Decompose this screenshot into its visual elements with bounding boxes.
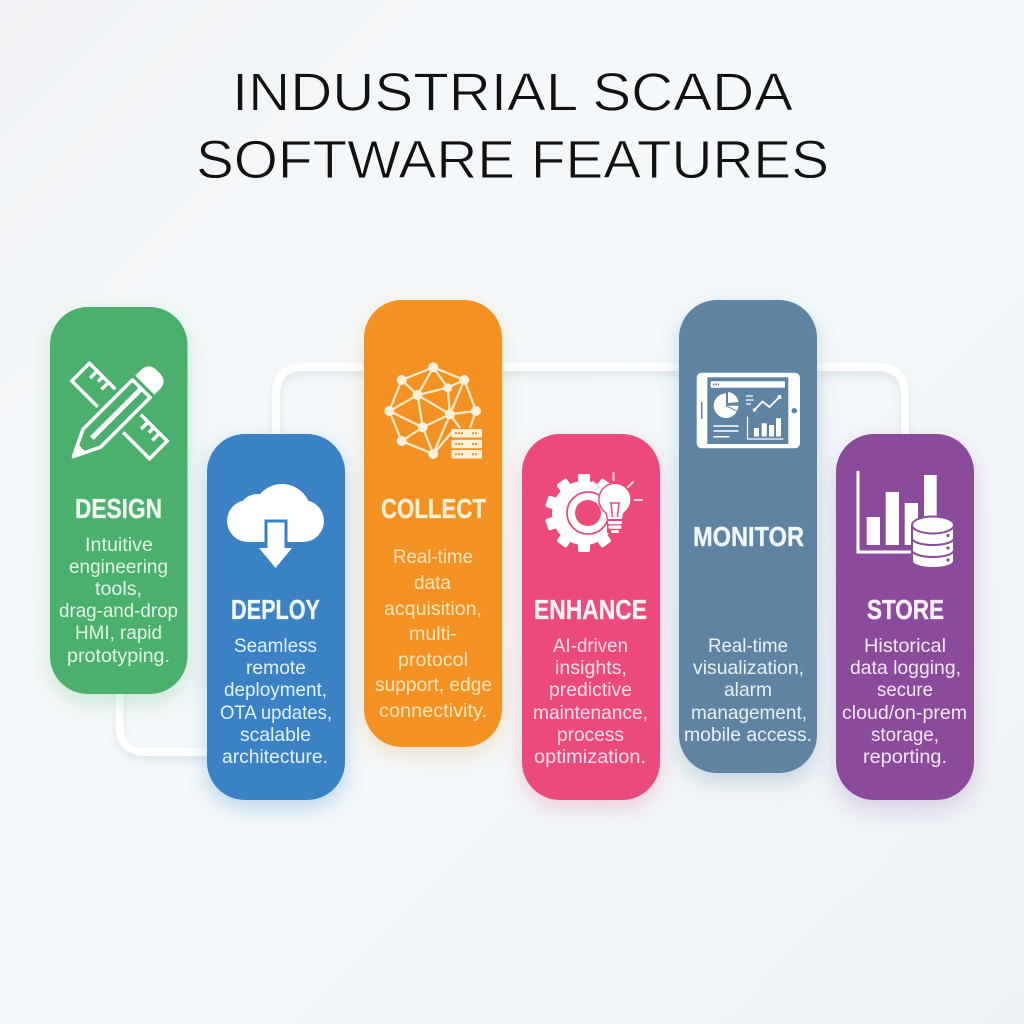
store description bbox=[842, 635, 967, 768]
monitor description: mobile access. bbox=[684, 724, 812, 746]
design description: HMI, rapid bbox=[75, 622, 162, 644]
design description: engineering bbox=[69, 556, 168, 578]
panel: monitor bbox=[679, 300, 817, 773]
collect card background bbox=[364, 300, 502, 747]
panel: collect bbox=[364, 300, 502, 747]
monitor description bbox=[684, 635, 812, 746]
enhance description: AI-driven bbox=[553, 635, 628, 657]
monitor heading: MONITOR bbox=[693, 521, 804, 552]
icon: cloud download bbox=[227, 484, 324, 568]
enhance description: optimization. bbox=[534, 746, 646, 768]
enhance card background bbox=[522, 434, 660, 800]
store description: Historical bbox=[864, 635, 946, 657]
collect description: Real-time bbox=[393, 546, 473, 568]
deploy description: scalable bbox=[240, 724, 311, 746]
design description: Intuitive bbox=[85, 534, 153, 556]
deploy card background bbox=[207, 434, 345, 800]
deploy description: architecture. bbox=[222, 746, 328, 768]
enhance description: process bbox=[557, 724, 624, 746]
collect heading: COLLECT bbox=[381, 493, 486, 524]
icon: data network bbox=[384, 362, 482, 459]
deploy description: remote bbox=[246, 657, 306, 679]
monitor description: management, bbox=[691, 702, 807, 724]
icon: tablet dashboard bbox=[697, 373, 800, 448]
monitor description: alarm bbox=[724, 679, 772, 701]
collect description: connectivity. bbox=[379, 700, 487, 722]
store description: reporting. bbox=[863, 746, 947, 768]
store description: data logging, bbox=[850, 657, 961, 679]
title: INDUSTRIAL SCADA bbox=[232, 64, 793, 122]
collect description: support, edge bbox=[375, 674, 492, 696]
monitor card background bbox=[679, 300, 817, 773]
enhance description: predictive bbox=[549, 679, 632, 701]
store description: storage, bbox=[871, 724, 939, 746]
collect description: multi- bbox=[409, 623, 457, 645]
design description bbox=[59, 534, 178, 667]
enhance heading: ENHANCE bbox=[534, 594, 647, 625]
panel: enhance bbox=[522, 434, 660, 800]
deploy description: Seamless bbox=[234, 635, 317, 657]
design description: prototyping. bbox=[67, 645, 170, 667]
enhance description: maintenance, bbox=[533, 702, 648, 724]
store card background bbox=[836, 434, 974, 800]
icon: bar chart and database bbox=[858, 471, 954, 568]
connector lines bbox=[120, 367, 905, 752]
icon: gear and light bulb bbox=[545, 473, 642, 552]
panel: deploy bbox=[207, 434, 345, 800]
store heading: STORE bbox=[867, 594, 944, 625]
collect description: acquisition, bbox=[384, 598, 482, 620]
deploy description: OTA updates, bbox=[220, 702, 332, 724]
monitor description: Real-time bbox=[708, 635, 788, 657]
design card background bbox=[50, 307, 188, 694]
panel: design bbox=[50, 307, 188, 694]
deploy description bbox=[220, 635, 332, 768]
deploy heading: DEPLOY bbox=[231, 594, 320, 625]
enhance description bbox=[533, 635, 648, 768]
enhance description: insights, bbox=[555, 657, 627, 679]
monitor description: visualization, bbox=[693, 657, 804, 679]
store description: cloud/on-prem bbox=[842, 702, 967, 724]
collect description: data bbox=[414, 572, 451, 594]
deploy description: deployment, bbox=[224, 679, 327, 701]
collect description: protocol bbox=[398, 649, 468, 671]
panel: store bbox=[836, 434, 974, 800]
title: SOFTWARE FEATURES bbox=[196, 131, 829, 190]
title bbox=[196, 64, 829, 190]
design description: drag-and-drop bbox=[59, 600, 178, 622]
icon: pencil and ruler bbox=[58, 359, 171, 472]
design description: tools, bbox=[95, 578, 142, 600]
collect description bbox=[375, 546, 492, 722]
design heading: DESIGN bbox=[75, 493, 162, 524]
store description: secure bbox=[877, 679, 933, 701]
